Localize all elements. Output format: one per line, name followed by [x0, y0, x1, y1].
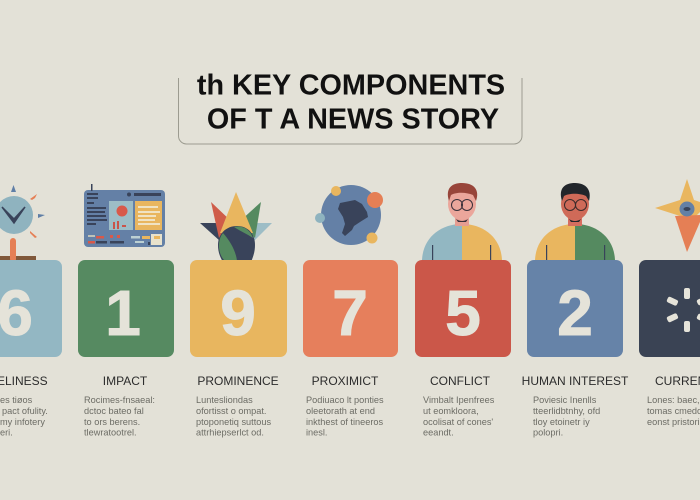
text: impact: dctoc bateo fal	[84, 406, 144, 416]
text: conflict: ut eomkloora,	[423, 406, 479, 416]
card 1: 1	[105, 277, 141, 349]
text: impact: tlewratootrel.	[84, 428, 137, 438]
card: currency burst	[639, 260, 700, 357]
card 2: 2	[557, 277, 593, 349]
icon: globe	[315, 185, 383, 245]
text: conflict: eeandt.	[423, 428, 454, 438]
card 5: 5	[445, 277, 481, 349]
text: timeliness: my infotery	[0, 417, 45, 427]
text: currency: Lones: baec,	[647, 395, 700, 405]
icon: prominence crown	[200, 192, 272, 262]
text: prominence: Luntesliondas	[196, 395, 253, 405]
text: proximity: inesl.	[306, 428, 327, 438]
icon: person with glasses	[422, 183, 502, 260]
card 7	[303, 260, 398, 357]
text: prominence: ofortisst o ompat.	[196, 406, 266, 416]
card 9	[190, 260, 287, 357]
text: human interest: tloy etoinetr iy	[533, 417, 590, 427]
icon: burst	[666, 288, 700, 332]
text: prominence: attrhiepserlct od.	[196, 428, 264, 438]
title line 1: th KEY COMPONENTS	[197, 70, 505, 102]
text: human interest: polopri.	[533, 428, 563, 438]
icon: person dark hair	[535, 183, 615, 260]
label: conflict: CONFLICT	[430, 374, 491, 388]
icon: compass star	[655, 179, 700, 252]
icon: news dashboard	[84, 184, 165, 247]
card 5	[415, 260, 511, 357]
text: conflict: Vimbalt Ipenfrees	[423, 395, 495, 405]
card 2	[527, 260, 623, 357]
text: proximity: oleetorath at end	[306, 406, 375, 416]
label: impact: IMPACT	[103, 374, 148, 388]
card 6	[0, 260, 62, 357]
text: timeliness: eri.	[0, 428, 13, 438]
card 9: 9	[220, 277, 256, 349]
text: timeliness: pact ofulity.	[2, 406, 48, 416]
label: prominence: PROMINENCE	[197, 374, 279, 388]
text: impact: Rocimes-fnsaeal:	[84, 395, 155, 405]
text: currency: eonst pristori	[647, 417, 700, 427]
text: human interest: Poviesic Inenlls	[533, 395, 597, 405]
icon: clock	[0, 185, 45, 262]
text: timeliness: es tiøos	[0, 395, 33, 405]
text: proximity: Podiuaco lt ponties	[306, 395, 384, 405]
text: proximity: inkthest of tineeros	[306, 417, 384, 427]
card 1	[78, 260, 174, 357]
label: human interest: HUMAN INTEREST	[522, 374, 629, 388]
text: impact: to ors berens.	[84, 417, 140, 427]
text: human interest: tteerlidbtnhy, ofd	[533, 406, 600, 416]
text: prominence: ptoponetiq suttous	[196, 417, 271, 427]
title line 2: OF T A NEWS STORY	[207, 104, 499, 136]
title block	[178, 70, 522, 144]
card 7: 7	[332, 277, 368, 349]
text: conflict: ocolisat of cones'	[423, 417, 493, 427]
label: proximity: PROXIMICT	[312, 374, 379, 388]
